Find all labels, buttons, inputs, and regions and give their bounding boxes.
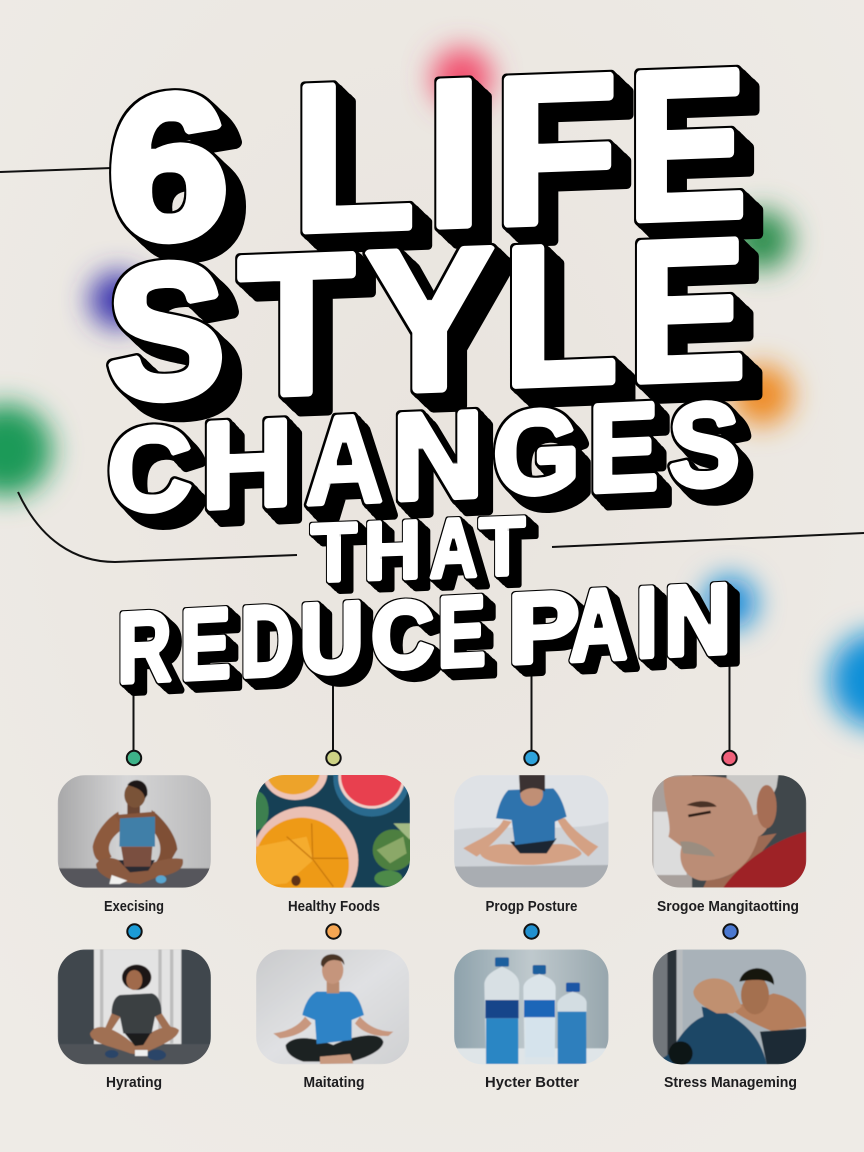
label: Srogoe Mangitaotting: Srogoe Mangitaotting — [657, 898, 799, 915]
title line 1: 6 LIFE: F — [492, 28, 619, 272]
title line 1: 6 LIFE: L — [290, 36, 417, 279]
title line 5: REDUCE PAIN: N — [664, 563, 731, 678]
title line 5: REDUCE PAIN: A — [570, 568, 627, 683]
photo: man holding his head over knee — [653, 949, 806, 1065]
title line 2: STYLE: S — [107, 224, 225, 440]
photo: older man in pain — [652, 775, 806, 888]
title line 4: THAT: A — [429, 500, 478, 596]
title line 4: THAT: T — [479, 498, 525, 594]
label: Stress Manageming: Stress Manageming — [664, 1074, 797, 1091]
label: Execising: Execising — [104, 898, 164, 915]
title line 1: 6 LIFE: E — [626, 24, 748, 267]
photo: man meditating in blue shirt — [256, 949, 409, 1064]
title line 3: CHANGES: E — [588, 375, 659, 519]
title line 5: REDUCE PAIN — [117, 563, 731, 705]
title line 2: STYLE: Y — [364, 204, 495, 435]
photo: seated woman in blue top — [58, 775, 211, 888]
title line 2: STYLE — [107, 195, 747, 445]
label: Hyrating: Hyrating — [106, 1074, 162, 1091]
blurred colour blobs — [0, 48, 864, 728]
title line 5: REDUCE PAIN: P — [508, 570, 580, 686]
label: Progp Posture: Progp Posture — [486, 898, 578, 915]
title line 3: CHANGES: S — [668, 378, 740, 513]
title line 4: THAT — [311, 498, 525, 600]
title line 3: CHANGES: H — [200, 391, 294, 536]
title line 3: CHANGES: G — [493, 385, 580, 521]
title line 5: REDUCE PAIN: I — [636, 566, 658, 679]
title line 1: 6 LIFE — [108, 24, 748, 286]
label: Healthy Foods: Healthy Foods — [288, 898, 380, 915]
photo: person with good posture on bed — [454, 775, 609, 888]
title line 5: REDUCE PAIN: D — [240, 584, 294, 699]
photo: water bottles — [454, 949, 609, 1065]
title line 3: CHANGES: A — [305, 387, 384, 532]
title line 3: CHANGES: C — [108, 402, 192, 538]
title line 5: REDUCE PAIN: E — [180, 587, 231, 702]
title line 5: REDUCE PAIN: U — [299, 581, 364, 696]
title line 5: REDUCE PAIN: E — [437, 575, 486, 689]
title line 2: STYLE: L — [501, 200, 619, 430]
title line 5: REDUCE PAIN: C — [371, 581, 434, 689]
title line 4: THAT: T — [311, 504, 357, 600]
label: Maitating: Maitating — [304, 1074, 364, 1091]
label: Hycter Botter: Hycter Botter — [485, 1074, 579, 1091]
connector lines — [0, 168, 864, 750]
photo: citrus and healthy foods — [256, 775, 410, 888]
title line 4: THAT: H — [363, 502, 422, 598]
title line 2: STYLE: E — [627, 195, 747, 425]
title line 3: CHANGES: N — [391, 383, 485, 528]
title line 2: STYLE: T — [237, 209, 356, 440]
photo: woman seated in dark shirt — [58, 949, 211, 1065]
node dots — [127, 751, 738, 939]
title line 1: 6 LIFE: I — [424, 33, 484, 274]
title line 3: CHANGES — [108, 372, 740, 540]
title line 1: 6 LIFE: 6 — [108, 51, 229, 284]
title line 5: REDUCE PAIN: R — [117, 590, 172, 705]
